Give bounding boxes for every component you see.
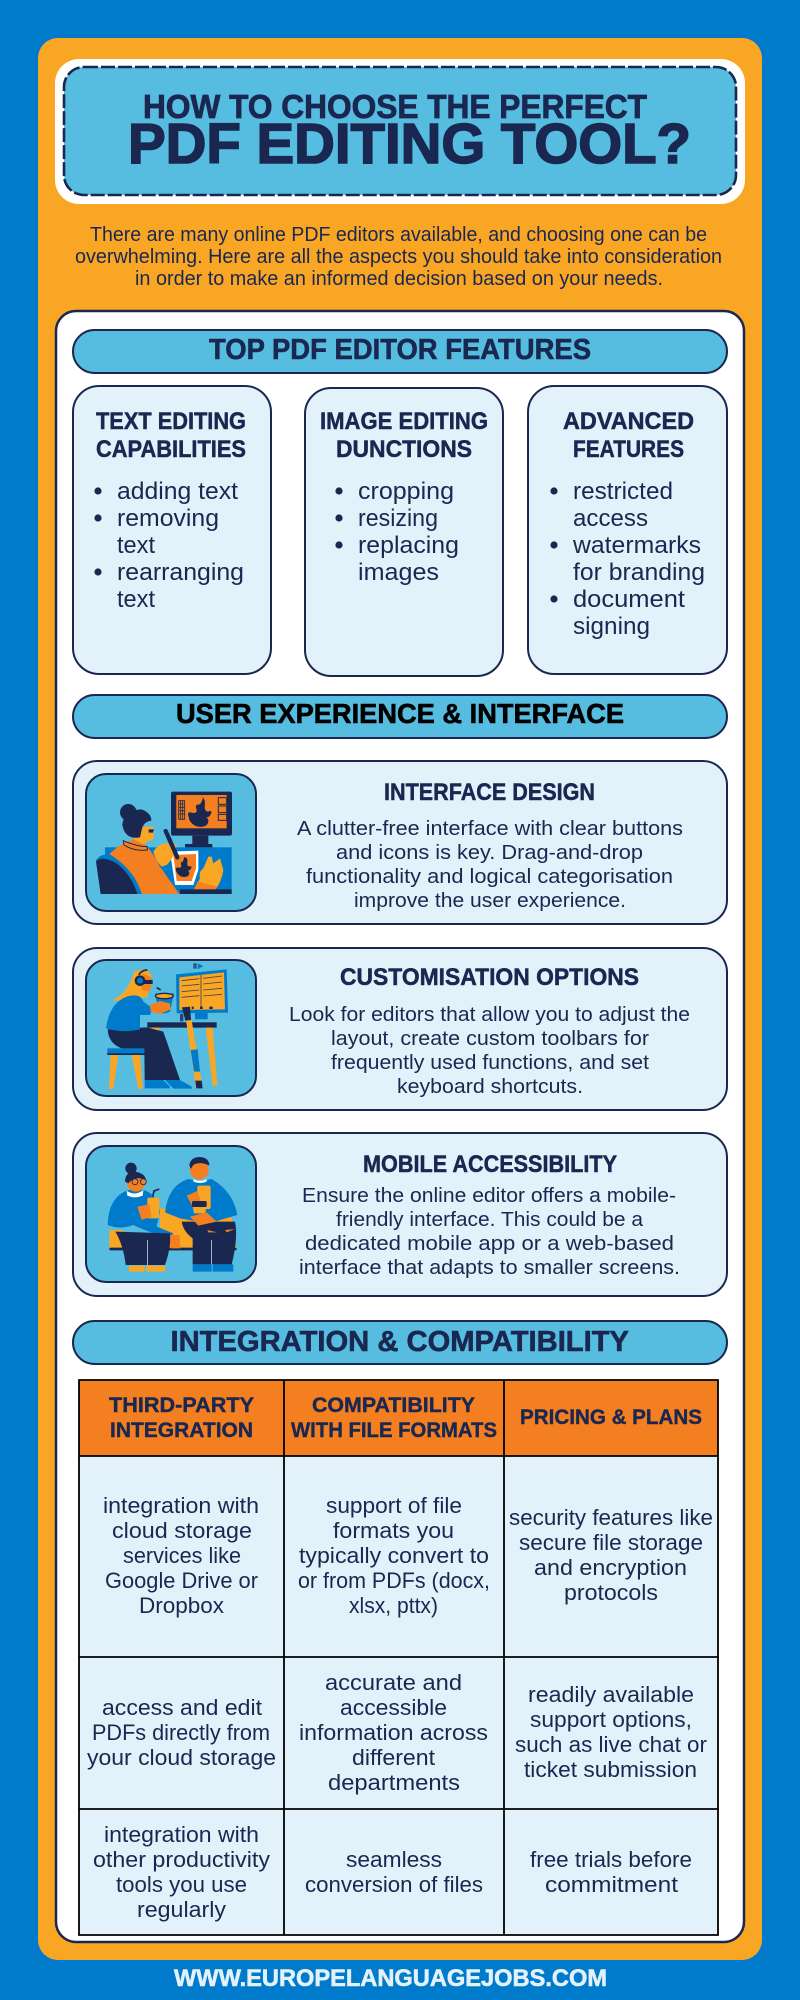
table row 2: your cloud storage [87, 1745, 276, 1770]
table row 2: accessible [340, 1695, 447, 1720]
table row 1: services like [123, 1543, 241, 1568]
table row 3: free trials before [530, 1847, 692, 1872]
table row 2: PDFs directly from [92, 1720, 270, 1745]
panel: text editing capabilities: removing [117, 505, 219, 532]
table row 1: formats you [333, 1518, 454, 1543]
section heading: integration and compatibility: INTEGRATION & COMPATIBILITY [170, 1326, 629, 1358]
panel: white content panel [56, 311, 744, 1942]
table row 1: or from PDFs (docx, [298, 1568, 490, 1593]
table header row [79, 1380, 718, 1456]
table row 2: ticket submission [524, 1757, 697, 1782]
table header row: COMPATIBILITY [312, 1394, 475, 1417]
table row 2: departments [328, 1770, 460, 1795]
table row 1: Dropbox [139, 1593, 224, 1618]
panel: text editing capabilities: adding text [117, 478, 238, 505]
text: mobile accessibility description: friendly interface. This could be a [336, 1208, 644, 1231]
table row 2: support options, [530, 1707, 692, 1732]
table row 3: seamless [346, 1847, 442, 1872]
section heading: top pdf editor features: TOP PDF EDITOR FEATURES [209, 334, 591, 366]
heading: interface design: INTERFACE DESIGN [384, 779, 595, 806]
panel: image editing functions: IMAGE EDITING [320, 408, 488, 435]
panel: image editing functions: DUNCTIONS [336, 436, 472, 463]
text: interface design description: improve the user experience. [354, 889, 626, 912]
footer website url: WWW.EUROPELANGUAGEJOBS.COM [174, 1965, 607, 1992]
panel: advanced features: FEATURES [573, 436, 684, 463]
intro paragraph [75, 223, 722, 290]
panel: image editing functions: images [358, 559, 439, 586]
panel: mobile accessibility [73, 1133, 727, 1296]
table row 3: integration with [104, 1822, 259, 1847]
section heading: integration and compatibility [73, 1321, 727, 1364]
panel: advanced features: for branding [573, 559, 705, 586]
panel: text editing capabilities: text [117, 532, 155, 559]
panel: text editing capabilities: rearranging [117, 559, 244, 586]
text: customisation description: frequently used functions, and set [331, 1051, 649, 1074]
intro paragraph: There are many online PDF editors available, and choosing one can be [90, 223, 707, 246]
panel: text editing capabilities: CAPABILITIES [96, 436, 246, 463]
heading: mobile accessibility: MOBILE ACCESSIBILITY [363, 1151, 617, 1178]
table row 3: conversion of files [305, 1872, 483, 1897]
panel: advanced features: document [573, 586, 685, 613]
text: interface design description: A clutter-free interface with clear buttons [297, 817, 683, 840]
table row 3: commitment [545, 1872, 678, 1897]
panel: advanced features: ADVANCED [563, 408, 694, 435]
title banner [55, 59, 745, 204]
table row 2: readily available [528, 1682, 694, 1707]
text: customisation description [289, 1003, 690, 1098]
text: interface design description: and icons is key. Drag-and-drop [336, 841, 643, 864]
panel: image editing functions: cropping [358, 478, 454, 505]
text: mobile accessibility description: dedicated mobile app or a web-based [305, 1232, 674, 1255]
panel: text editing capabilities: text [117, 586, 155, 613]
panel: advanced features [528, 386, 727, 674]
table row 2: accurate and [325, 1670, 462, 1695]
table row 3: other productivity [93, 1847, 270, 1872]
icon: woman drawing on tablet [96, 792, 232, 894]
table row 1: protocols [564, 1580, 658, 1605]
panel: advanced features: watermarks [572, 532, 701, 559]
panel: image editing functions [305, 388, 503, 676]
intro paragraph: in order to make an informed decision based on your needs. [135, 267, 663, 290]
panel: text editing capabilities [73, 386, 271, 674]
section heading: top pdf editor features [73, 330, 727, 373]
text: mobile accessibility description: Ensure the online editor offers a mobile- [302, 1184, 676, 1207]
panel: advanced features: signing [573, 613, 650, 640]
table row 3: tools you use [116, 1872, 247, 1897]
table row 2: access and edit [102, 1695, 262, 1720]
table header row: THIRD-PARTY [109, 1394, 254, 1417]
table row 2: information across [299, 1720, 488, 1745]
table row 3: regularly [137, 1897, 226, 1922]
panel: advanced features: restricted [573, 478, 673, 505]
text: customisation description: Look for editors that allow you to adjust the [289, 1003, 690, 1026]
text: interface design description [297, 817, 683, 912]
table row 1 [103, 1493, 713, 1618]
section heading: user experience and interface: USER EXPERIENCE & INTERFACE [176, 698, 624, 729]
heading: customisation options: CUSTOMISATION OPTIONS [340, 964, 639, 991]
table header row: INTEGRATION [110, 1419, 253, 1442]
table row 1: Google Drive or [105, 1568, 258, 1593]
panel: text editing capabilities: TEXT EDITING [96, 408, 246, 435]
icon: two people on phones on a bench [108, 1157, 237, 1272]
table row 1: cloud storage [112, 1518, 252, 1543]
table row 1: support of file [326, 1493, 462, 1518]
title line 2: PDF EDITING TOOL? [128, 112, 691, 176]
table row 2: different [352, 1745, 435, 1770]
table header row: PRICING & PLANS [520, 1406, 702, 1429]
text: customisation description: keyboard shortcuts. [397, 1075, 583, 1098]
icon: person at desktop with headphones [106, 963, 228, 1089]
panel: image editing functions: resizing [358, 505, 438, 532]
table row 1: security features like [509, 1505, 713, 1530]
text: mobile accessibility description [299, 1184, 680, 1279]
intro paragraph: overwhelming. Here are all the aspects you should take into consideration [75, 245, 722, 268]
table row 2 [87, 1670, 707, 1795]
panel: customisation options [73, 948, 727, 1110]
table row 1: typically convert to [299, 1543, 489, 1568]
text: mobile accessibility description: interface that adapts to smaller screens. [299, 1256, 680, 1279]
text: interface design description: functionality and logical categorisation [306, 865, 673, 888]
panel: advanced features: access [573, 505, 648, 532]
title line 1: HOW TO CHOOSE THE PERFECT [143, 88, 647, 125]
table row 1: integration with [103, 1493, 259, 1518]
table row 1: secure file storage [519, 1530, 703, 1555]
table row 2: such as live chat or [515, 1732, 707, 1757]
table row 1: and encryption [534, 1555, 687, 1580]
table row 3 [93, 1822, 692, 1922]
table row 1: xlsx, pttx) [349, 1593, 438, 1618]
table: integration and compatibility [79, 1380, 718, 1935]
section heading: user experience and interface [73, 695, 727, 738]
table header row: WITH FILE FORMATS [291, 1419, 497, 1442]
text: customisation description: layout, create custom toolbars for [331, 1027, 649, 1050]
panel: interface design [73, 761, 727, 924]
panel: image editing functions: replacing [358, 532, 459, 559]
